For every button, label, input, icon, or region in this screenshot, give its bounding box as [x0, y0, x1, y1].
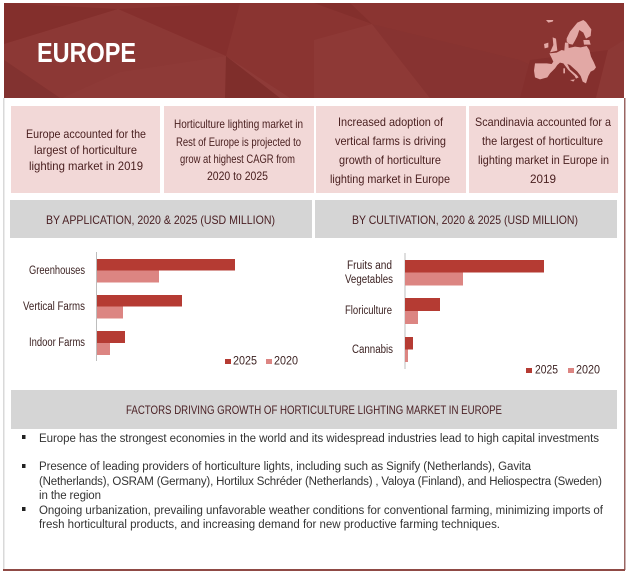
- heading: by application: [10, 200, 312, 238]
- bar chart: cultivation: Cannabis: [352, 344, 393, 356]
- panel: by application: [10, 200, 312, 368]
- card: Rest of Europe growth: 2020 to 2025: [207, 169, 268, 183]
- bullet: urbanization: [22, 505, 604, 531]
- legend: cultivation: 2025: [535, 364, 558, 376]
- card: Rest of Europe growth: Rest of Europe is projected to: [176, 135, 301, 149]
- bar chart: cultivation: [345, 253, 600, 376]
- panel: growth factors: [11, 390, 617, 531]
- card: vertical farms adoption: [316, 106, 466, 193]
- heading: by cultivation: BY CULTIVATION, 2020 & 2025 (USD MILLION): [352, 213, 578, 227]
- title: EUROPE: [37, 37, 136, 68]
- legend: cultivation: 2020: [576, 364, 600, 376]
- card: Europe largest in 2019: [11, 106, 160, 193]
- heading: by application: BY APPLICATION, 2020 & 2025 (USD MILLION): [46, 213, 275, 227]
- panel: key insight cards: [11, 106, 618, 193]
- card: vertical farms adoption: lighting market in Europe: [330, 172, 450, 186]
- legend: cultivation: [526, 364, 600, 376]
- bullet: leading providers: [22, 461, 602, 502]
- panel: by cultivation: [315, 200, 617, 376]
- card: Rest of Europe growth: grow at highest CAGR from: [180, 152, 295, 166]
- card: vertical farms adoption: Increased adoption of: [338, 115, 444, 129]
- card: Scandinavia largest: lighting market in Europe in: [478, 153, 609, 167]
- legend: application: [225, 356, 298, 368]
- card: vertical farms adoption: growth of horticulture: [339, 153, 441, 167]
- bar chart: application: Indoor Farms: [29, 337, 85, 349]
- card: vertical farms adoption: vertical farms is driving: [335, 134, 446, 148]
- header banner: [4, 3, 624, 98]
- bar chart: cultivation: Fruits and: [347, 260, 392, 272]
- bar chart: application: Vertical Farms: [23, 301, 85, 313]
- bullet: strong economies: Europe has the strongest economies in the world and its widespread industries lead to high capital investments: [39, 433, 599, 445]
- bullet: leading providers: (Netherlands), OSRAM (Germany), Hortilux Schréder (Netherlands) , Valoya (Finland), and Heliospectra (Sweden): [39, 476, 602, 488]
- icon: Europe map: [534, 20, 596, 83]
- heading: growth factors: [11, 390, 617, 429]
- bullet: urbanization: fresh horticultural products, and increasing demand for new productive farming techniques.: [39, 519, 500, 531]
- bar chart: cultivation: Vegetables: [345, 274, 393, 286]
- card: Scandinavia largest: Scandinavia accounted for a: [475, 115, 611, 129]
- card: Rest of Europe growth: Horticulture lighting market in: [174, 117, 303, 131]
- legend: application: 2020: [274, 356, 298, 368]
- card: Europe largest in 2019: lighting market in 2019: [29, 159, 143, 173]
- card: Rest of Europe growth: [164, 106, 314, 193]
- bar chart: cultivation: Floriculture: [345, 305, 392, 317]
- heading: growth factors: FACTORS DRIVING GROWTH OF HORTICULTURE LIGHTING MARKET IN EUROPE: [126, 403, 502, 417]
- bar chart: application: [23, 252, 298, 368]
- bullet: leading providers: Presence of leading providers of horticulture lights, including such as Signify (Netherlands), Gavita: [39, 461, 532, 473]
- legend: application: 2025: [233, 356, 257, 368]
- card: Europe largest in 2019: Europe accounted for the: [26, 127, 146, 141]
- bullet: leading providers: in the region: [39, 490, 101, 502]
- bar chart: application: Greenhouses: [29, 265, 85, 277]
- card: Scandinavia largest: 2019: [530, 172, 556, 186]
- card: Scandinavia largest: the largest of horticulture: [482, 134, 603, 148]
- bullet: urbanization: Ongoing urbanization, prevailing unfavorable weather conditions for conventional farming, minimizing imports of: [39, 505, 604, 517]
- card: Scandinavia largest: [469, 106, 618, 193]
- card: Europe largest in 2019: largest of horticulture: [34, 143, 137, 157]
- heading: by cultivation: [315, 200, 617, 238]
